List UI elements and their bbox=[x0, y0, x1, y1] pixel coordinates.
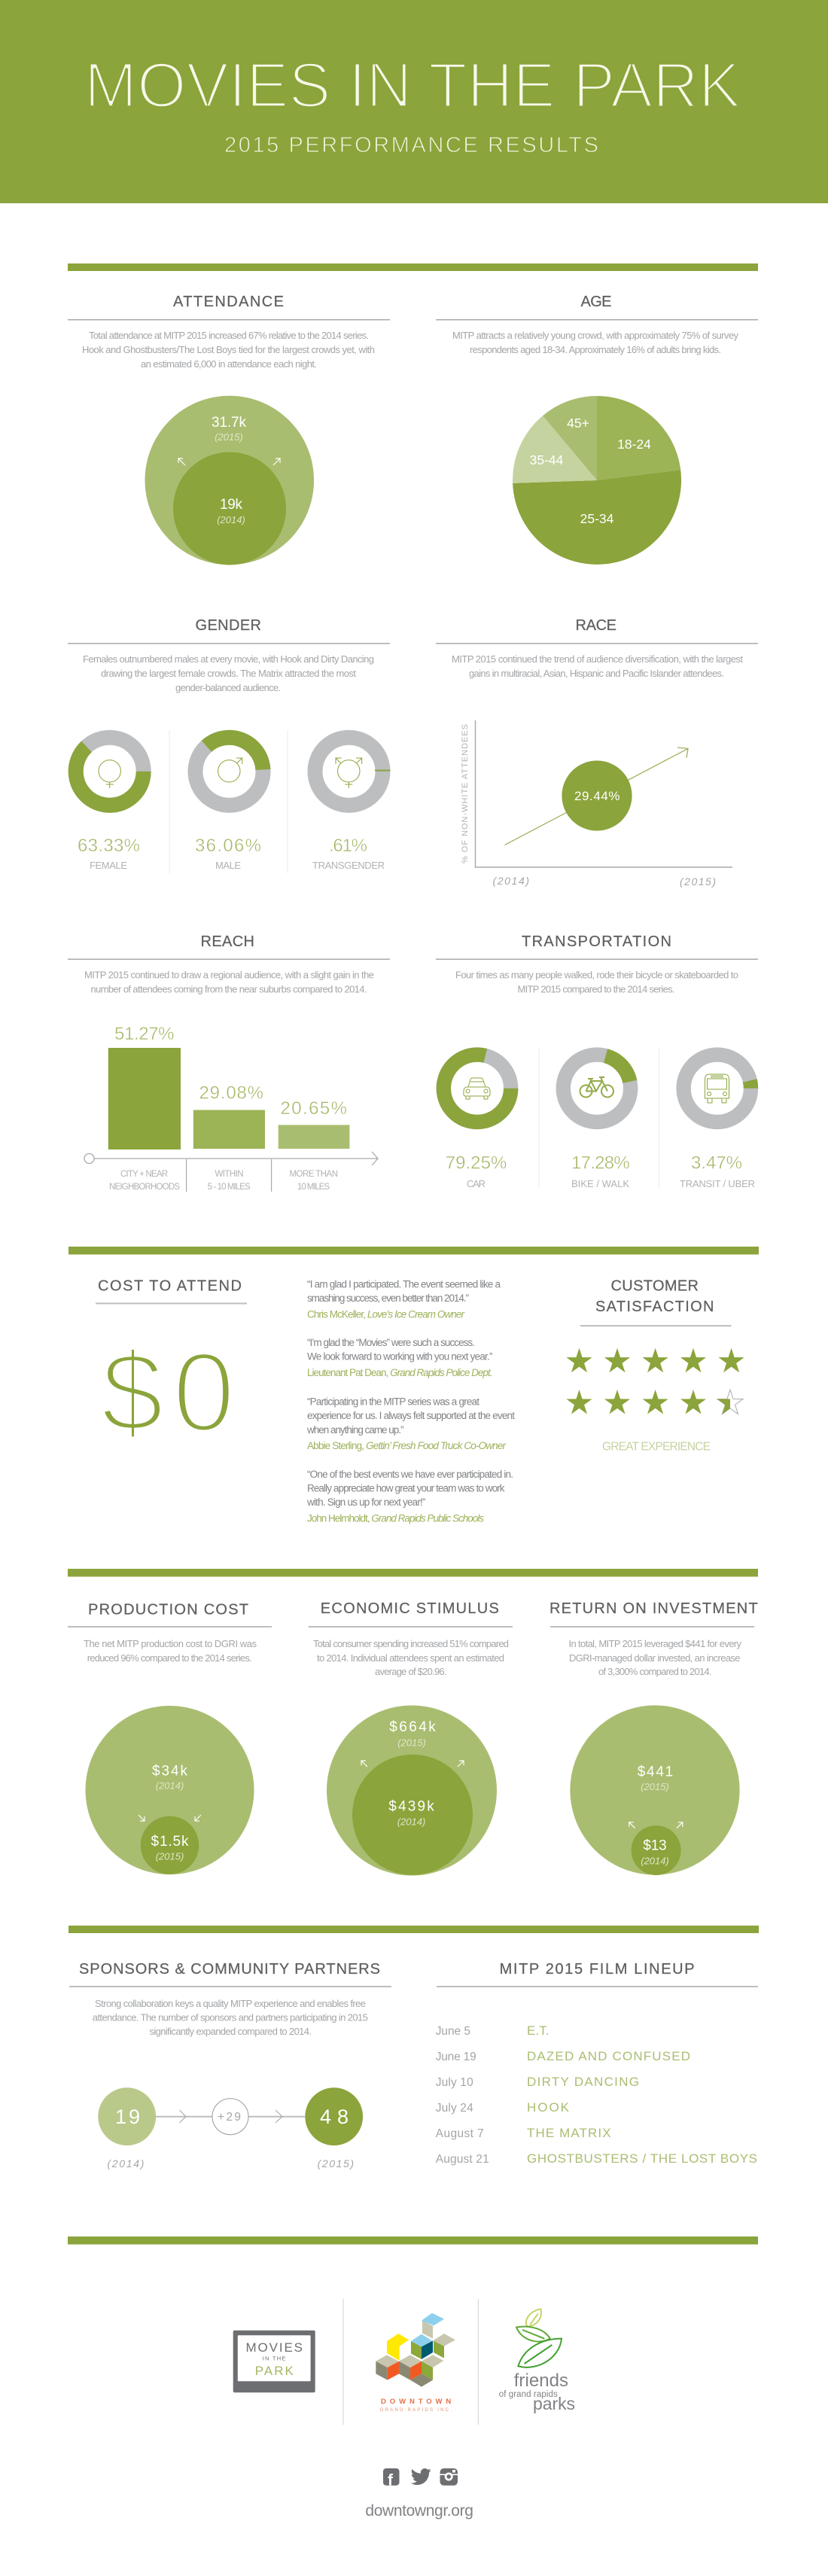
text: age description bbox=[452, 330, 739, 355]
chart: attendance nested circles: 31.7k bbox=[212, 415, 247, 431]
subtitle: 2015 PERFORMANCE RESULTS bbox=[224, 133, 598, 157]
quote: Pat Dean: We look forward to working with you next year.” bbox=[307, 1350, 492, 1363]
title: MOVIES IN THE PARK bbox=[84, 50, 741, 120]
text: transportation description: MITP 2015 compared to the 2014 series. bbox=[518, 983, 674, 995]
chart: attendance nested circles bbox=[145, 396, 314, 565]
chart: production cost circles bbox=[86, 1706, 254, 1874]
logo: movies in the park bbox=[233, 2331, 315, 2392]
quote: Pat Dean: Lieutenant Pat Dean, Grand Rapids Police Dept. bbox=[307, 1367, 492, 1378]
text: website: downtowngr.org bbox=[365, 2502, 473, 2520]
text: age description: respondents aged 18-34. Approximately 16% of adults bring kids. bbox=[470, 344, 721, 355]
heading: economic stimulus: ECONOMIC STIMULUS bbox=[321, 1600, 499, 1617]
icon: facebook bbox=[383, 2468, 399, 2489]
chart: age pie: 18-24 bbox=[617, 437, 651, 452]
chart: reach bars: 20.65% bbox=[280, 1098, 347, 1119]
row: Hook: HOOK bbox=[527, 2100, 570, 2115]
text: attendance description bbox=[82, 330, 375, 370]
logo: movies in the park: MOVIES bbox=[245, 2340, 303, 2355]
chart: return on investment circles: (2014) bbox=[641, 1855, 669, 1867]
heading: cost to attend: COST TO ATTEND bbox=[98, 1278, 242, 1295]
row: The Matrix: August 7 bbox=[436, 2127, 484, 2140]
text: race description bbox=[452, 653, 743, 679]
icon: bicycle bbox=[580, 1077, 613, 1098]
chart: sponsor growth flow: (2014) bbox=[107, 2157, 144, 2170]
stat: bike and walk: 17.28% bbox=[571, 1153, 630, 1173]
icon: instagram bbox=[440, 2468, 458, 2486]
text: gender description: drawing the largest female crowds. The Matrix attracted the most bbox=[101, 668, 356, 679]
chart: return on investment circles: $13 bbox=[643, 1838, 667, 1853]
stat: car: CAR bbox=[467, 1178, 486, 1189]
chart: reach bars: 10 MILES bbox=[297, 1183, 330, 1192]
chart: production cost circles: (2015) bbox=[156, 1850, 184, 1862]
heading: sponsors: SPONSORS & COMMUNITY PARTNERS bbox=[79, 1961, 380, 1978]
logo: movies in the park: IN THE bbox=[263, 2355, 285, 2362]
quote: John Helmholdt: Really appreciate how great your team was to work bbox=[307, 1483, 505, 1494]
heading: transportation: TRANSPORTATION bbox=[522, 933, 671, 950]
text: transportation description: Four times as many people walked, rode their bicycle or skateboarded to bbox=[455, 970, 738, 980]
text: return on investment description bbox=[569, 1638, 742, 1677]
chart: attendance nested circles: (2014) bbox=[217, 514, 245, 525]
quote: John Helmholdt: “One of the best events we have ever participated in. bbox=[307, 1469, 513, 1480]
row: Dirty Dancing: July 10 bbox=[436, 2076, 473, 2089]
chart: bike donut bbox=[563, 1055, 631, 1122]
text: economic stimulus description: Total consumer spending increased 51% compared bbox=[313, 1638, 509, 1649]
chart: race trend line: 29.44% bbox=[574, 789, 620, 803]
chart: economic stimulus circles: (2015) bbox=[397, 1737, 426, 1748]
icon: male symbol bbox=[218, 758, 242, 782]
text: economic stimulus description: to 2014. Individual attendees spent an estimated bbox=[317, 1652, 504, 1664]
text: sponsors description: attendance. The number of sponsors and partners participating in 2015 bbox=[93, 2011, 368, 2023]
chart: transgender donut bbox=[315, 738, 390, 805]
chart: sponsor growth flow: 48 bbox=[320, 2106, 349, 2128]
icon: bus bbox=[705, 1074, 729, 1103]
heading: gender: GENDER bbox=[196, 617, 261, 634]
panel: reach bbox=[68, 933, 390, 1192]
chart: reach bars bbox=[84, 1024, 378, 1192]
text: reach description bbox=[84, 970, 374, 995]
chart: production cost circles: $34k bbox=[152, 1763, 188, 1780]
quote: Abbie Sterling: Abbie Sterling, Gettin’ Fresh Food Truck Co-Owner bbox=[307, 1440, 506, 1451]
row: Dazed and Confused: DAZED AND CONFUSED bbox=[527, 2049, 690, 2063]
stat: female bbox=[78, 836, 140, 871]
chart: economic stimulus circles: (2014) bbox=[397, 1816, 425, 1828]
icon: facebook: f bbox=[388, 2472, 394, 2489]
icon: shrink arrows bbox=[139, 1815, 201, 1821]
row: Ghostbusters / The Lost Boys: August 21 bbox=[436, 2153, 489, 2166]
panel: transportation bbox=[436, 933, 758, 1189]
chart: race trend line: % OF NON-WHITE ATTENDEES bbox=[461, 724, 470, 863]
chart: economic stimulus circles: $664k bbox=[389, 1719, 436, 1735]
chart: reach bars: 5 - 10 MILES bbox=[208, 1183, 251, 1192]
chart: transit donut bbox=[683, 1055, 751, 1122]
chart: age pie: 35-44 bbox=[530, 452, 564, 467]
quote: Abbie Sterling: when anything came up.” bbox=[306, 1424, 403, 1436]
chart: sponsor growth flow: +29 bbox=[218, 2111, 241, 2124]
row: Dazed and Confused: June 19 bbox=[436, 2051, 476, 2063]
quote: Pat Dean bbox=[307, 1337, 492, 1378]
panel: attendance bbox=[68, 294, 390, 565]
logo: movies in the park: PARK bbox=[255, 2364, 294, 2378]
stat: female: FEMALE bbox=[90, 860, 127, 871]
stat: car: 79.25% bbox=[446, 1153, 507, 1173]
row: Dirty Dancing bbox=[436, 2075, 639, 2089]
panel: cost to attend bbox=[96, 1278, 247, 1455]
stat: transgender bbox=[312, 836, 385, 871]
row: Hook bbox=[436, 2100, 570, 2115]
heading: customer satisfaction: CUSTOMER bbox=[611, 1278, 699, 1295]
icon: growth arrows bbox=[361, 1761, 464, 1767]
chart: age pie: 45+ bbox=[567, 416, 589, 431]
logo: downtown grand rapids inc: DOWNTOWN bbox=[381, 2398, 451, 2406]
icon: isometric cubes bbox=[376, 2313, 455, 2387]
text: age description: MITP attracts a relatively young crowd, with approximately 75% of survey bbox=[452, 330, 739, 341]
heading: attendance: ATTENDANCE bbox=[173, 294, 284, 310]
text: attendance description: an estimated 6,000 in attendance each night. bbox=[141, 358, 317, 370]
logo: friends of grand rapids parks bbox=[499, 2309, 575, 2413]
quote: Chris McKeller bbox=[307, 1278, 501, 1320]
heading: customer satisfaction: SATISFACTION bbox=[595, 1299, 714, 1315]
text: sponsors description bbox=[93, 1998, 368, 2037]
chart: race trend line: (2015) bbox=[680, 875, 716, 888]
text: attendance description: Total attendance at MITP 2015 increased 67% relative to the 2014 series. bbox=[89, 330, 369, 341]
text: transportation description bbox=[455, 970, 738, 995]
logo: friends of grand rapids parks: friends bbox=[514, 2370, 568, 2391]
icon: leaves bbox=[516, 2309, 562, 2367]
label: great experience: GREAT EXPERIENCE bbox=[602, 1441, 711, 1453]
text: production cost description bbox=[84, 1638, 257, 1664]
quote: John Helmholdt bbox=[306, 1469, 513, 1524]
logo: downtown grand rapids inc bbox=[376, 2313, 455, 2413]
text: reach description: number of attendees coming from the near suburbs compared to 2014. bbox=[90, 983, 367, 995]
row: E.T.: E.T. bbox=[527, 2023, 549, 2038]
chart: car donut bbox=[443, 1055, 511, 1122]
row: Hook: July 24 bbox=[436, 2102, 473, 2115]
chart: production cost circles: (2014) bbox=[156, 1780, 184, 1792]
chart: male donut bbox=[196, 738, 263, 805]
quote: Abbie Sterling: experience for us. I always felt supported at the event bbox=[307, 1410, 515, 1421]
icon: car bbox=[464, 1078, 490, 1099]
text: production cost description: The net MITP production cost to DGRI was bbox=[84, 1638, 257, 1649]
chart: sponsor growth flow bbox=[98, 2087, 363, 2170]
icon: growth arrows bbox=[178, 458, 280, 465]
quote: Chris McKeller: Chris McKeller, Love’s Ice Cream Owner bbox=[307, 1308, 465, 1320]
text: economic stimulus description bbox=[313, 1638, 509, 1677]
heading: production cost: PRODUCTION COST bbox=[88, 1602, 248, 1618]
stat: transgender: .61% bbox=[329, 836, 367, 856]
chart: sponsor growth flow: 19 bbox=[115, 2106, 140, 2128]
chart: economic stimulus circles: $439k bbox=[388, 1799, 434, 1814]
chart: attendance nested circles: 19k bbox=[220, 497, 242, 513]
panel: race bbox=[436, 617, 758, 888]
chart: age pie bbox=[513, 396, 681, 565]
text: gender description: Females outnumbered males at every movie, with Hook and Dirty Dancing bbox=[83, 653, 374, 665]
icon: star rating bbox=[566, 1348, 744, 1414]
text: production cost description: reduced 96% compared to the 2014 series. bbox=[87, 1652, 252, 1664]
text: race description: gains in multiracial, Asian, Hispanic and Pacific Islander attendees. bbox=[469, 668, 724, 679]
stat: male bbox=[195, 836, 261, 871]
stat: transgender: TRANSGENDER bbox=[312, 860, 385, 871]
chart: return on investment circles bbox=[570, 1705, 740, 1875]
chart: reach bars: 29.08% bbox=[199, 1082, 263, 1104]
stat: male: MALE bbox=[215, 860, 241, 871]
panel: testimonials bbox=[306, 1278, 515, 1524]
row: E.T.: June 5 bbox=[436, 2025, 470, 2038]
text: return on investment description: of 3,300% compared to 2014. bbox=[598, 1666, 712, 1677]
stat: transit and uber: TRANSIT / UBER bbox=[680, 1178, 755, 1189]
quote: Chris McKeller: smashing success, even better than 2014.” bbox=[307, 1293, 469, 1304]
quote: Chris McKeller: “I am glad I participated. The event seemed like a bbox=[307, 1278, 501, 1290]
chart: reach bars: WITHIN bbox=[215, 1170, 244, 1179]
panel: production cost bbox=[68, 1602, 272, 1874]
chart: reach bars: CITY + NEAR bbox=[120, 1170, 168, 1179]
panel: customer satisfaction bbox=[566, 1278, 744, 1453]
text: return on investment description: In total, MITP 2015 leveraged $441 for every bbox=[569, 1638, 742, 1649]
panel: return on investment bbox=[549, 1600, 758, 1875]
quote: Abbie Sterling bbox=[306, 1396, 515, 1451]
chart: return on investment circles: $441 bbox=[638, 1765, 673, 1780]
icon: growth arrows bbox=[629, 1822, 683, 1828]
text: sponsors description: Strong collaboration keys a quality MITP experience and enables free bbox=[95, 1998, 366, 2009]
stat: male: 36.06% bbox=[195, 836, 261, 856]
big number: zero dollars bbox=[101, 1329, 235, 1455]
icon: transgender symbol bbox=[336, 758, 362, 788]
panel: gender bbox=[68, 617, 390, 873]
chart: age pie: 25-34 bbox=[580, 511, 614, 526]
row: E.T. bbox=[436, 2023, 549, 2038]
row: Dazed and Confused bbox=[436, 2049, 690, 2063]
stat: transit and uber: 3.47% bbox=[691, 1153, 742, 1173]
row: Ghostbusters / The Lost Boys: GHOSTBUSTERS / THE LOST BOYS bbox=[527, 2151, 757, 2166]
quote: Abbie Sterling: “Participating in the MITP series was a great bbox=[307, 1396, 479, 1408]
text: gender description bbox=[83, 653, 374, 693]
icon: female symbol bbox=[99, 760, 120, 788]
chart: race trend line bbox=[461, 720, 732, 888]
panel: film lineup bbox=[436, 1961, 758, 2166]
panel: age bbox=[436, 294, 758, 565]
panel: sponsors and community partners bbox=[69, 1961, 391, 2170]
chart: reach bars: MORE THAN bbox=[289, 1170, 338, 1179]
heading: return on investment: RETURN ON INVESTMENT bbox=[549, 1600, 758, 1617]
stat: female: 63.33% bbox=[78, 836, 140, 856]
stat: car bbox=[446, 1153, 507, 1189]
heading: age: AGE bbox=[581, 294, 611, 310]
logo: friends of grand rapids parks: parks bbox=[533, 2394, 575, 2413]
panel: economic stimulus bbox=[309, 1600, 513, 1876]
text: race description: MITP 2015 continued the trend of audience diversification, with the largest bbox=[452, 653, 743, 665]
text: reach description: MITP 2015 continued to draw a regional audience, with a slight gain in the bbox=[84, 970, 374, 980]
quote: John Helmholdt: with. Sign us up for next year!” bbox=[306, 1497, 426, 1508]
text: attendance description: Hook and Ghostbusters/The Lost Boys tied for the largest crowds yet, with bbox=[82, 344, 375, 355]
text: sponsors description: significantly expanded compared to 2014. bbox=[149, 2026, 312, 2037]
chart: female donut bbox=[76, 738, 144, 805]
chart: attendance nested circles: (2015) bbox=[215, 431, 243, 443]
text: gender description: gender-balanced audience. bbox=[175, 682, 281, 693]
chart: production cost circles: $1.5k bbox=[151, 1834, 189, 1850]
text: return on investment description: DGRI-managed dollar invested, an increase bbox=[569, 1652, 741, 1664]
row: The Matrix bbox=[436, 2126, 611, 2140]
header banner bbox=[0, 0, 828, 203]
arrow: distance axis bbox=[84, 1152, 378, 1165]
heading: reach: REACH bbox=[200, 933, 254, 950]
stat: transit and uber bbox=[680, 1153, 755, 1189]
row: Dirty Dancing: DIRTY DANCING bbox=[527, 2075, 639, 2089]
big number: zero dollars: 0 bbox=[172, 1329, 235, 1455]
logo: friends of grand rapids parks: of grand rapids bbox=[499, 2390, 558, 2399]
chart: race trend line: (2014) bbox=[492, 875, 529, 887]
chart: return on investment circles: (2015) bbox=[641, 1781, 669, 1792]
heading: customer satisfaction bbox=[595, 1278, 714, 1315]
text: economic stimulus description: average of $20.96. bbox=[375, 1666, 447, 1677]
stat: bike and walk bbox=[571, 1153, 630, 1189]
heading: film lineup: MITP 2015 FILM LINEUP bbox=[500, 1961, 695, 1978]
quote: John Helmholdt: John Helmholdt, Grand Rapids Public Schools bbox=[307, 1513, 484, 1524]
quote: Pat Dean: “I’m glad the “Movies” were such a success. bbox=[307, 1337, 475, 1348]
heading: race: RACE bbox=[575, 617, 616, 634]
row: The Matrix: THE MATRIX bbox=[527, 2126, 611, 2140]
chart: reach bars: 51.27% bbox=[114, 1024, 175, 1044]
logo: downtown grand rapids inc: GRAND RAPIDS INC. bbox=[380, 2408, 452, 2413]
icon: twitter bbox=[411, 2468, 431, 2485]
big number: zero dollars: $ bbox=[101, 1329, 163, 1455]
chart: economic stimulus circles bbox=[327, 1706, 497, 1876]
chart: sponsor growth flow: (2015) bbox=[318, 2157, 354, 2170]
chart: reach bars: NEIGHBORHOODS bbox=[109, 1183, 180, 1192]
stat: bike and walk: BIKE / WALK bbox=[571, 1178, 629, 1189]
